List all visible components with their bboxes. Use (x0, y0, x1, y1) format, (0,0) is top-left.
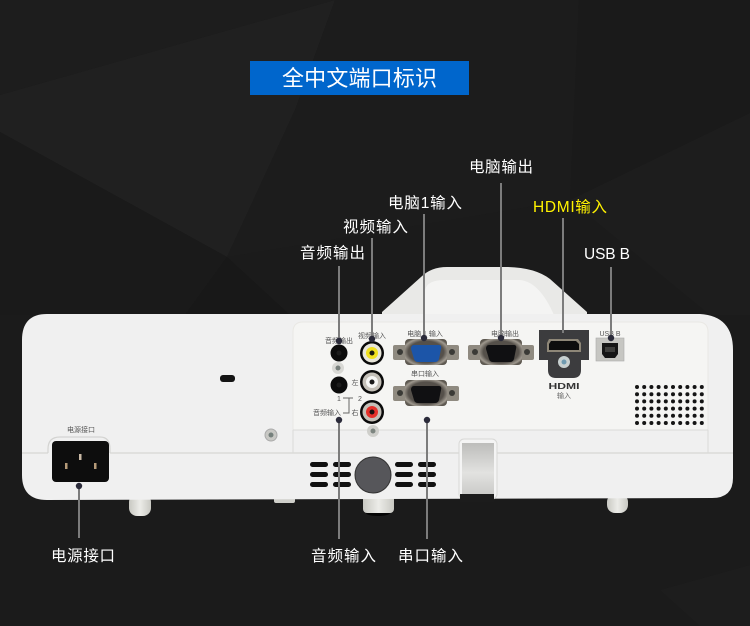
callout: serial input (398, 417, 463, 565)
callout: computer output (469, 158, 533, 341)
HDMI port (539, 330, 589, 400)
screw left (265, 429, 277, 441)
front vents and lens knob (310, 457, 436, 493)
projector (22, 267, 733, 516)
audio jacks: 左 (352, 378, 358, 387)
HDMI port: 输入 (557, 391, 571, 400)
callout: HDMI input (533, 198, 607, 333)
callout: audio input: 音频输入 (311, 547, 376, 565)
audio jacks: 音频输入 (313, 408, 341, 417)
rear recess panel (293, 322, 708, 430)
audio jacks (313, 336, 362, 417)
callout: video input (343, 218, 408, 342)
callout: power socket: 电源接口 (51, 547, 115, 565)
callout: audio input (311, 417, 376, 565)
RCA ports (358, 331, 386, 437)
callout: HDMI input: HDMI输入 (533, 198, 607, 216)
front slot (459, 439, 497, 502)
callout: computer 1 input: 电脑1输入 (388, 194, 462, 212)
callout: USB B (584, 246, 630, 341)
callout: video input: 视频输入 (343, 218, 408, 236)
VGA computer output (468, 329, 534, 365)
RCA ports: 视频输入 (358, 331, 386, 340)
callout: serial input: 串口输入 (398, 547, 463, 565)
indicator slot (220, 375, 235, 382)
VGA computer 1 input: 电脑 1 输入 (407, 329, 443, 338)
callout: audio output: 音频输出 (300, 244, 365, 262)
power socket (48, 425, 110, 482)
callout: computer 1 input (388, 194, 462, 341)
VGA serial input: 串口输入 (411, 369, 439, 378)
VGA computer output: 电脑输出 (491, 329, 519, 338)
audio jacks: 1 (337, 396, 341, 403)
audio jacks: 2 (358, 396, 362, 403)
USB B port (596, 331, 624, 361)
USB B port: USB B (599, 331, 621, 338)
VGA serial input (393, 369, 459, 406)
speaker grille (635, 385, 704, 425)
handle (382, 267, 587, 320)
audio jacks: 音频输出 (325, 336, 353, 345)
power socket: 电源接口 (67, 425, 95, 434)
feet (129, 494, 628, 516)
callout: audio output (300, 244, 365, 344)
VGA computer 1 input (393, 329, 459, 365)
audio jacks: 右 (352, 408, 358, 417)
title banner: 全中文端口标识 (282, 66, 437, 91)
callout: USB B: USB B (584, 246, 630, 263)
callout: computer output: 电脑输出 (469, 158, 533, 176)
callout: power socket (51, 483, 115, 565)
body (22, 314, 733, 500)
HDMI port: HDMI (548, 381, 580, 391)
title banner (250, 61, 469, 95)
